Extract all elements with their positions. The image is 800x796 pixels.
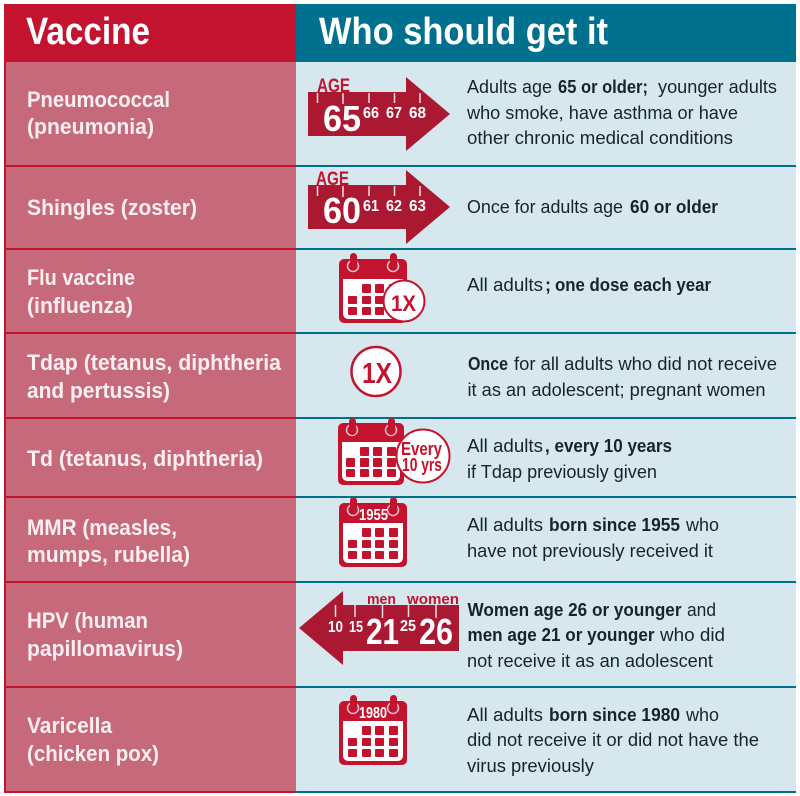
row label: MMR: MMR (measles, (27, 515, 177, 540)
icon: calendar every 10 years (338, 418, 450, 485)
row label: Varicella (27, 713, 159, 766)
text: pneumococcal recommendation: younger adults (658, 77, 777, 97)
text: HPV recommendation: who did (659, 625, 725, 645)
icon: HPV age arrow: men (367, 591, 396, 608)
icon: age 65 arrow: 68 (409, 105, 426, 122)
row label: Shingles: Shingles (zoster) (27, 195, 197, 220)
panel: vaccine column (4, 62, 296, 793)
text: MMR recommendation: who (685, 515, 719, 535)
text: Td recommendation (467, 436, 672, 482)
text: flu recommendation: ; (545, 275, 551, 295)
icon: calendar with 1X: 1X (391, 291, 416, 316)
row label: Varicella: (chicken pox) (27, 741, 159, 766)
icon: age 60 arrow (308, 169, 450, 244)
text: Td recommendation: All adults (467, 436, 543, 456)
row label: Pneumococcal (27, 87, 170, 139)
heading: Vaccine: Vaccine (26, 11, 150, 53)
row label: Pneumococcal: Pneumococcal (27, 87, 170, 112)
icon: HPV age arrow: 25 (400, 618, 416, 635)
icon: calendar 1980: 1980 (359, 705, 387, 722)
icon: calendar 1955: 1955 (359, 507, 388, 524)
text: flu recommendation: one dose each year (555, 275, 711, 295)
row label: HPV: HPV (human (27, 608, 148, 633)
row label: HPV: papillomavirus) (27, 636, 183, 661)
icon: age 65 arrow: AGE (317, 76, 350, 97)
icon: age 60 arrow: 63 (409, 198, 426, 215)
text: pneumococcal recommendation: Adults age (467, 77, 552, 97)
icon: HPV age arrow (299, 591, 459, 665)
row label: Td: Td (tetanus, diphtheria) (27, 446, 263, 471)
text: HPV recommendation: and (687, 600, 716, 620)
row label: Flu vaccine (27, 265, 135, 318)
text: varicella recommendation: did not receive it or did not have the (467, 730, 759, 750)
text: Tdap recommendation: it as an adolescent; pregnant women (468, 380, 766, 400)
row label: Pneumococcal: (pneumonia) (27, 114, 154, 139)
text: MMR recommendation (467, 515, 719, 561)
text: MMR recommendation: All adults (467, 515, 543, 535)
icon: age 60 arrow: 60 (323, 190, 361, 231)
icon: calendar 1980 (339, 695, 407, 765)
text: shingles recommendation (467, 197, 718, 217)
row label: MMR: mumps, rubella) (27, 542, 190, 567)
icon: age 65 arrow: 65 (323, 98, 361, 139)
icon: age 65 arrow: 66 (363, 105, 379, 122)
icon: calendar 1955 (339, 497, 407, 567)
icon: 1X circle (352, 347, 400, 396)
icon: calendar with 1X (339, 253, 424, 323)
text: pneumococcal recommendation: who smoke, have asthma or have (466, 103, 738, 123)
text: Tdap recommendation (468, 354, 777, 400)
panel: who should get it column (296, 62, 796, 793)
text: Tdap recommendation: Once (468, 354, 508, 374)
text: shingles recommendation: Once for adults age (467, 197, 623, 217)
icon: 1X circle: 1X (362, 358, 393, 390)
text: MMR recommendation: have not previously received it (467, 541, 713, 561)
text: Tdap recommendation: for all adults who did not receive (514, 354, 777, 374)
row label: Varicella: Varicella (27, 713, 113, 738)
row label: Flu vaccine: Flu vaccine (27, 265, 135, 290)
text: varicella recommendation (467, 705, 759, 776)
icon: age 65 arrow (308, 76, 450, 151)
text: HPV recommendation (467, 600, 725, 671)
row label: Flu vaccine: (influenza) (27, 293, 133, 318)
text: Td recommendation: , every 10 years (545, 436, 672, 456)
row label: HPV (27, 608, 183, 661)
icon: HPV age arrow: 21 (366, 611, 399, 652)
icon: calendar every 10 years: 10 yrs (402, 455, 442, 475)
icon: HPV age arrow: 10 (328, 619, 343, 636)
icon: age 65 arrow: 67 (386, 105, 402, 122)
row label: Tdap: Tdap (tetanus, diphtheria (27, 350, 282, 375)
icon: calendar every 10 years: Every (401, 439, 442, 459)
text: pneumococcal recommendation: 65 or older; (558, 77, 648, 97)
text: varicella recommendation: All adults (467, 705, 543, 725)
text: varicella recommendation: born since 1980 (549, 705, 680, 725)
icon: HPV age arrow: women (406, 591, 459, 608)
text: varicella recommendation: virus previously (467, 756, 594, 776)
icon: HPV age arrow: 15 (349, 619, 363, 636)
text: HPV recommendation: not receive it as an adolescent (467, 651, 713, 671)
icon: age 60 arrow: 61 (363, 198, 379, 215)
heading: Who should get it (296, 4, 796, 62)
text: pneumococcal recommendation: other chronic medical conditions (467, 128, 733, 148)
text: shingles recommendation: 60 or older (630, 197, 718, 217)
icon: age 60 arrow: AGE (316, 169, 349, 190)
row label: Tdap: and pertussis) (27, 378, 170, 403)
text: pneumococcal recommendation (466, 77, 777, 148)
text: MMR recommendation: born since 1955 (549, 515, 680, 535)
text: HPV recommendation: Women age 26 or younger (468, 600, 682, 620)
heading: Vaccine (4, 4, 296, 62)
row label: Tdap (27, 350, 282, 403)
text: varicella recommendation: who (685, 705, 719, 725)
icon: age 60 arrow: 62 (386, 198, 402, 215)
text: flu recommendation (467, 275, 711, 295)
text: HPV recommendation: men age 21 or younger (468, 625, 654, 645)
text: Td recommendation: if Tdap previously given (467, 462, 657, 482)
text: flu recommendation: All adults (467, 275, 543, 295)
heading: Who should get it: Who should get it (319, 11, 608, 53)
row label: MMR (27, 515, 190, 567)
icon: HPV age arrow: 26 (419, 611, 453, 652)
